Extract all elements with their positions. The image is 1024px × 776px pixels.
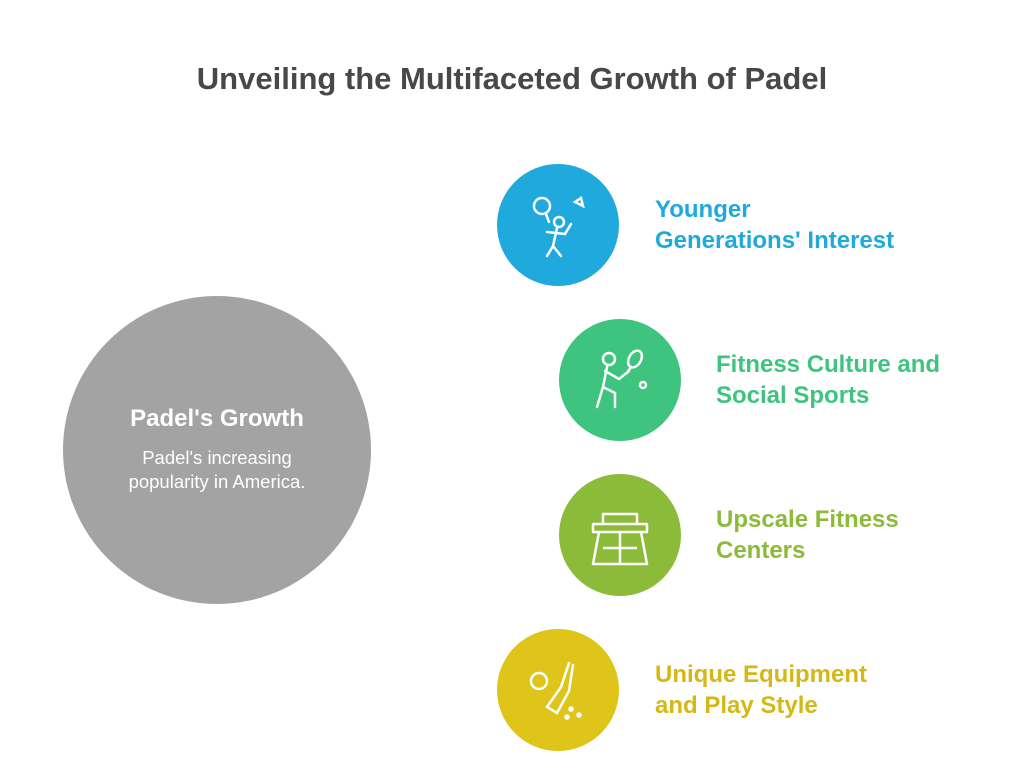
central description: Padel's increasing — [142, 447, 292, 468]
label: unique equipment — [655, 661, 867, 719]
central description: popularity in America. — [129, 471, 305, 492]
label: younger generations: Generations' Interest — [655, 227, 894, 254]
label: younger generations: Younger — [655, 196, 751, 223]
icon circle: upscale fitness centers — [559, 474, 681, 596]
label: upscale fitness centers: Upscale Fitness — [716, 506, 899, 533]
title: Unveiling the Multifaceted Growth of Padel — [197, 61, 827, 96]
central heading: Padel's Growth — [130, 405, 304, 432]
icon circle: younger generations — [497, 164, 619, 286]
label: upscale fitness centers: Centers — [716, 537, 805, 564]
label: upscale fitness centers — [716, 506, 899, 564]
label: fitness culture — [716, 351, 940, 409]
label: unique equipment: Unique Equipment — [655, 661, 867, 688]
label: fitness culture: Fitness Culture and — [716, 351, 940, 378]
label: younger generations — [655, 196, 894, 254]
icon circle: unique equipment — [497, 629, 619, 751]
label: unique equipment: and Play Style — [655, 692, 818, 719]
icon circle: fitness culture — [559, 319, 681, 441]
label: fitness culture: Social Sports — [716, 382, 869, 409]
central description — [129, 447, 305, 492]
central circle: Padel's Growth — [63, 296, 371, 604]
